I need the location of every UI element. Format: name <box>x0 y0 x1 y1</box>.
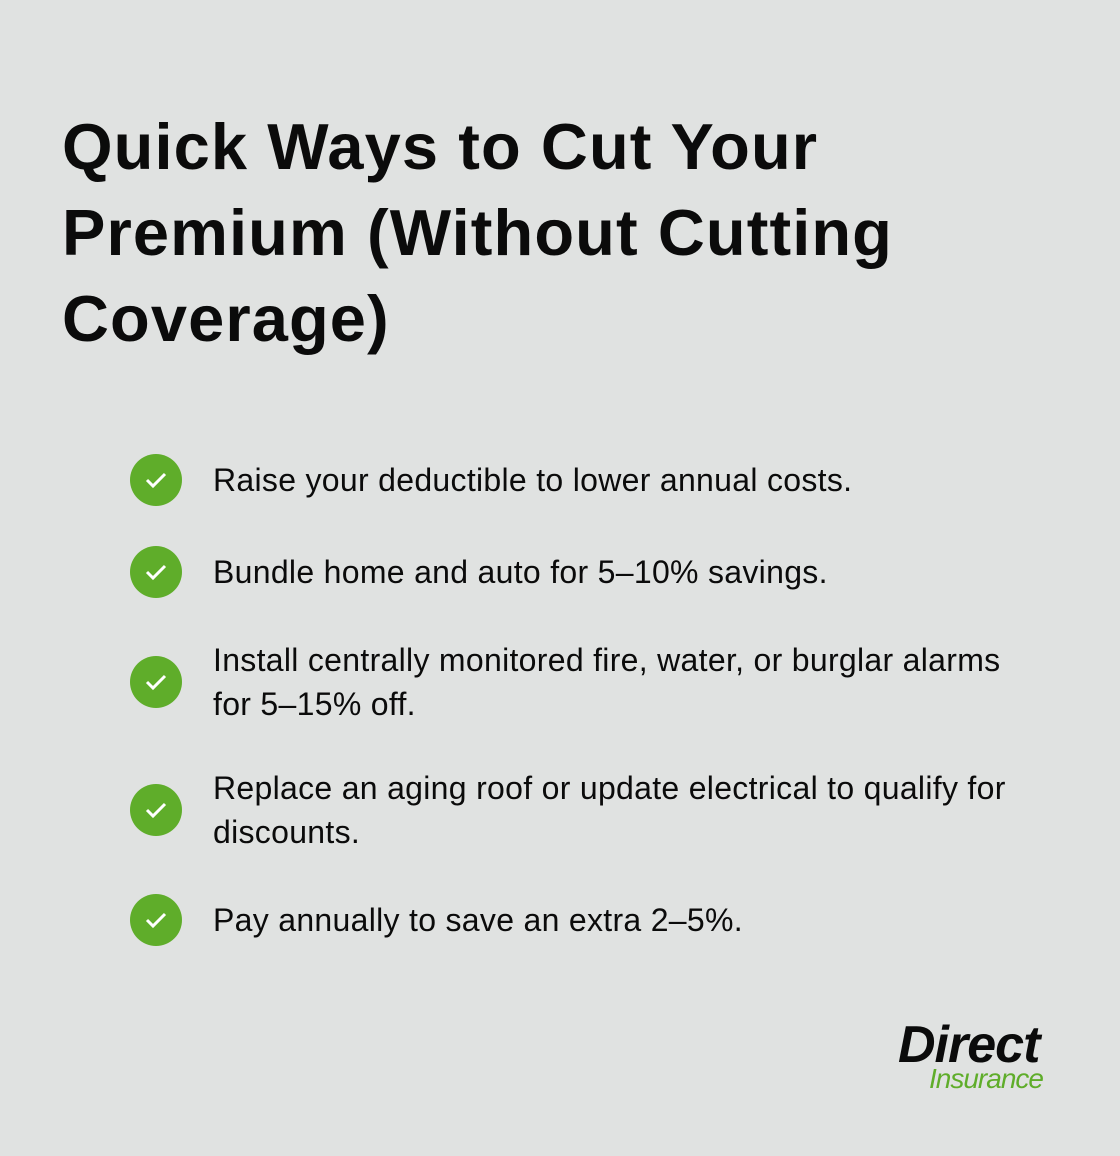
item 4: discounts. <box>213 814 360 850</box>
icon: check <box>130 656 182 708</box>
title: Coverage) <box>62 282 390 355</box>
logo: Direct <box>898 1016 1039 1074</box>
icon: check <box>130 454 182 506</box>
item 4: Replace an aging roof or update electrical to qualify for <box>213 770 1006 806</box>
item 5: Pay annually to save an extra 2–5%. <box>213 902 743 938</box>
item 2: Bundle home and auto for 5–10% savings. <box>213 554 828 590</box>
title: Premium (Without Cutting <box>62 196 893 269</box>
icon: check <box>130 784 182 836</box>
logo: Insurance <box>929 1063 1043 1094</box>
title: Quick Ways to Cut Your <box>62 110 818 183</box>
item 1 <box>130 454 852 506</box>
item 2 <box>130 546 828 598</box>
item 5 <box>130 894 743 946</box>
title <box>62 110 893 355</box>
item 3 <box>130 642 1000 722</box>
item 1: Raise your deductible to lower annual costs. <box>213 462 852 498</box>
item 3: Install centrally monitored fire, water, or burglar alarms <box>213 642 1000 678</box>
icon: check <box>130 894 182 946</box>
item 4 <box>130 770 1006 850</box>
icon: check <box>130 546 182 598</box>
item 3: for 5–15% off. <box>213 686 416 722</box>
